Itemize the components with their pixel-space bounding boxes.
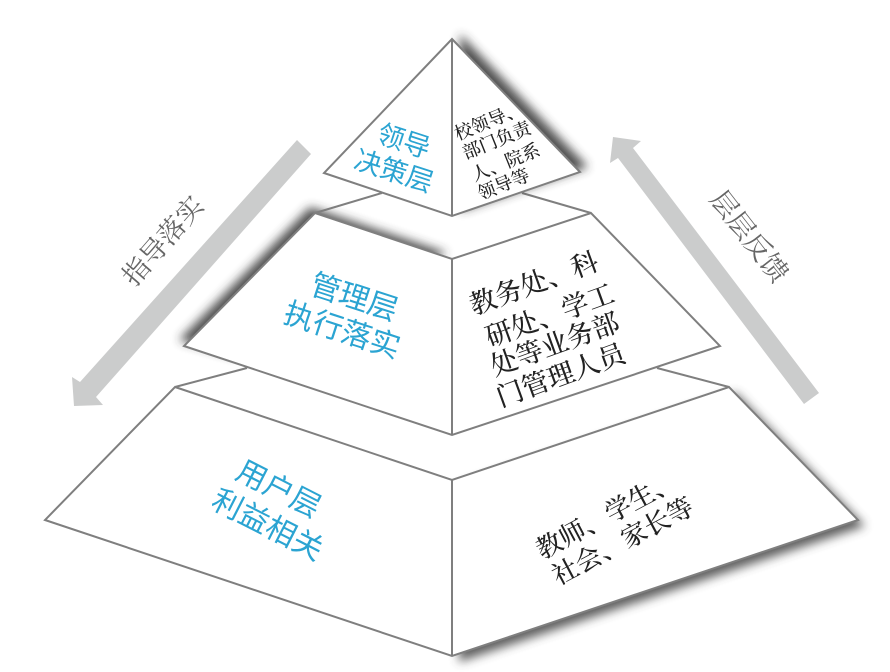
text: leadership tier subtitle: 决策层	[351, 145, 437, 198]
text: user tier members line 2: 社会、家长等	[547, 492, 699, 591]
middle tier: management	[179, 193, 720, 435]
text: leadership members line 4: 领导等	[475, 165, 533, 204]
top tier: leadership	[324, 34, 588, 216]
text: management members line 1: 教务处、科	[465, 246, 602, 321]
text: leadership members line 1: 校领导、	[452, 99, 526, 144]
heading: leadership tier: 领导	[373, 119, 434, 164]
text: management members line 3: 处等业务部	[486, 307, 623, 382]
text: management members line 2: 研处、学工	[481, 278, 618, 353]
text: user tier members line 1: 教师、学生、	[531, 466, 683, 565]
arrow: top-down guidance	[72, 140, 311, 406]
text: leadership members line 2: 部门负责	[460, 117, 536, 163]
text: leadership members line 3: 人、院系	[469, 140, 543, 185]
arrow: bottom-up feedback	[610, 137, 819, 404]
label: feedback: 层层反馈	[704, 185, 794, 288]
text: management members line 4: 门管理人员	[492, 337, 632, 413]
text: management tier subtitle: 执行落实	[280, 297, 404, 365]
label: guidance: 指导落实	[116, 191, 210, 292]
text: user tier subtitle: 利益相关	[206, 484, 328, 567]
bottom tier: users	[45, 368, 865, 662]
heading: user tier: 用户层	[231, 454, 326, 525]
heading: management tier: 管理层	[306, 268, 402, 328]
